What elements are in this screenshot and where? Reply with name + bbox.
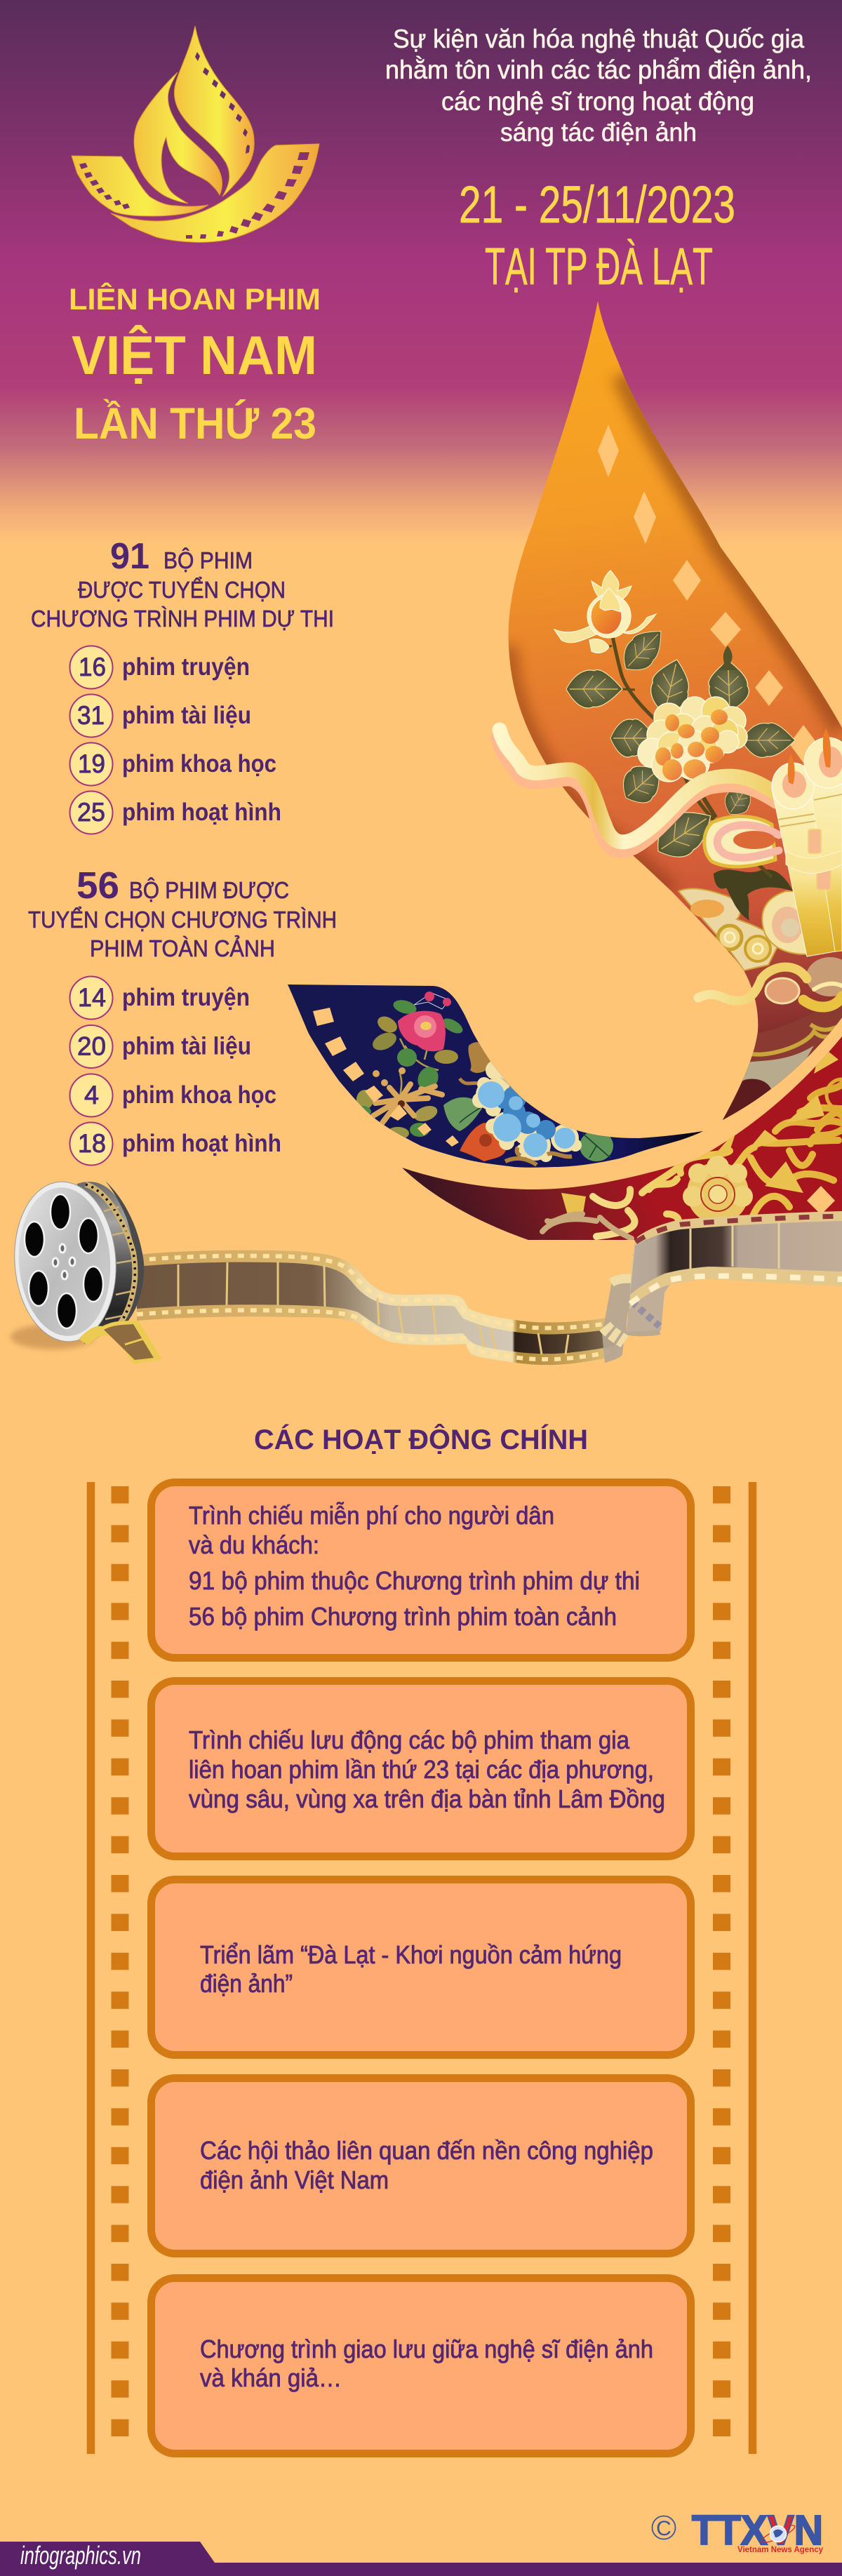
panel: artist exchange <box>152 2278 690 2453</box>
panel: free screenings: 56 bộ phim Chương trình phim toàn cảnh <box>189 1602 617 1631</box>
panel: exhibition <box>152 1879 690 2055</box>
embroidered flowers <box>400 1039 439 1100</box>
illustration: flowing ribbon <box>495 730 779 867</box>
panel: artist exchange: Chương trình giao lưu giữa nghệ sĩ điện ảnh <box>200 2335 653 2363</box>
panorama: animated films <box>70 1123 281 1165</box>
panel: free screenings <box>152 1482 690 1657</box>
reel holes <box>25 1194 103 1328</box>
competition heading: BỘ PHIM <box>163 547 253 573</box>
icon: festival logo <box>72 26 319 242</box>
title: festival name: LIÊN HOAN PHIM <box>69 282 321 316</box>
diamond perforation <box>807 1186 835 1215</box>
competition: science films: phim khoa học <box>122 750 276 778</box>
panel: artist exchange: và khán giả… <box>200 2363 342 2392</box>
title: festival name: VIỆT NAM <box>72 324 317 386</box>
panel: mobile screenings: Trình chiếu lưu động các bộ phim tham gia <box>189 1726 630 1754</box>
illustration: navy film ribbon <box>288 985 703 1168</box>
competition: documentary films: phim tài liệu <box>122 702 251 729</box>
logo: TTXVN agency: TTXVN <box>692 2507 823 2554</box>
panorama: feature films: phim truyện <box>122 984 250 1011</box>
gold scrollwork <box>593 1084 842 1236</box>
competition: feature films: phim truyện <box>122 653 250 681</box>
ribbon bow <box>704 816 775 867</box>
illustration: red brocade ribbon <box>402 1036 842 1240</box>
competition heading: 91 <box>110 536 149 577</box>
competition heading: ĐƯỢC TUYỂN CHỌN <box>78 577 286 603</box>
competition: documentary films <box>70 695 251 737</box>
text block: date and venue: TẠI TP ĐÀ LẠT <box>485 237 713 295</box>
competition: documentary films: 31 <box>77 701 105 730</box>
logo: TTXVN agency: C <box>656 2517 671 2540</box>
lower red clouds <box>723 1011 842 1120</box>
title: festival name <box>69 282 321 448</box>
text block: date and venue: 21 - 25/11/2023 <box>459 175 735 234</box>
illustration: peony branch <box>554 570 795 877</box>
reel face <box>9 1178 121 1345</box>
green branches <box>714 869 793 921</box>
panel: exhibition: điện ảnh” <box>200 1969 293 1998</box>
competition heading: CHƯƠNG TRÌNH PHIM DỰ THI <box>31 606 334 632</box>
peony flower <box>638 697 747 782</box>
panorama heading: 56 <box>76 865 119 907</box>
panel: seminars <box>152 2078 690 2254</box>
footer bar with site name: infographics.vn <box>20 2541 141 2570</box>
rosebud <box>554 570 656 653</box>
panel: exhibition: Triển lãm “Đà Lạt - Khơi nguồn cảm hứng <box>200 1940 622 1969</box>
panel: free screenings: và du khách: <box>189 1530 319 1559</box>
text block: panorama films <box>28 865 337 1165</box>
illustration: lower cloud ribbon <box>698 967 842 1007</box>
competition: science films <box>70 742 276 786</box>
text block: competition films <box>31 536 334 834</box>
text block: event description: Sự kiện văn hóa nghệ thuật Quốc gia <box>393 25 804 53</box>
loose film end <box>79 1321 162 1364</box>
reel body <box>77 1182 144 1344</box>
text block: event description: sáng tác điện ảnh <box>500 118 697 147</box>
reel shadow <box>11 1324 95 1349</box>
panorama: science films <box>70 1074 276 1117</box>
competition: feature films: 16 <box>79 653 106 681</box>
panorama: documentary films: 20 <box>77 1032 106 1061</box>
heading: main activities: CÁC HOẠT ĐỘNG CHÍNH <box>254 1423 588 1455</box>
panel: free screenings: Trình chiếu miễn phí cho người dân <box>189 1501 554 1530</box>
competition: animated films: 25 <box>77 798 105 827</box>
text block: event description: các nghệ sĩ trong hoạt động <box>441 87 754 116</box>
panorama heading <box>28 865 337 961</box>
competition: animated films <box>70 792 281 834</box>
film strip twist and loop <box>602 1279 660 1363</box>
panel: mobile screenings <box>152 1681 690 1857</box>
panorama: feature films <box>70 977 250 1019</box>
panorama: animated films: 18 <box>78 1129 106 1158</box>
title: festival name: LẦN THỨ 23 <box>74 399 316 448</box>
panel: mobile screenings: liên hoan phim lần thứ 23 tại các địa phương, <box>189 1755 654 1784</box>
upper film strip <box>629 1211 842 1309</box>
text block: event description: nhằm tôn vinh các tác phẩm điện ảnh, <box>385 55 812 84</box>
panorama heading: TUYỂN CHỌN CHƯƠNG TRÌNH <box>28 907 337 933</box>
panorama heading: BỘ PHIM ĐƯỢC <box>129 877 289 903</box>
footer bar with site name <box>0 2541 842 2576</box>
panorama: animated films: phim hoạt hình <box>122 1130 281 1157</box>
panel: mobile screenings: vùng sâu, vùng xa trên địa bàn tỉnh Lâm Đồng <box>189 1784 665 1813</box>
panel: seminars: điện ảnh Việt Nam <box>200 2165 389 2194</box>
competition: science films: 19 <box>78 749 105 778</box>
decorative clouds <box>679 888 779 970</box>
competition: animated films: phim hoạt hình <box>122 799 281 826</box>
logo: TTXVN agency: Vietnam News Agency <box>737 2546 824 2554</box>
text block: date and venue <box>459 175 735 295</box>
panorama heading: PHIM TOÀN CẢNH <box>90 935 275 961</box>
panorama: science films: 4 <box>84 1081 99 1109</box>
brocade peony <box>683 1156 753 1224</box>
panorama: documentary films: phim tài liệu <box>122 1033 251 1060</box>
panorama: feature films: 14 <box>78 983 106 1012</box>
illustration: paper scrolls with wicks <box>772 728 842 956</box>
illustration: long film strip <box>137 1211 842 1365</box>
text block: event description <box>385 25 812 147</box>
panorama: documentary films <box>70 1025 251 1068</box>
film perforations <box>313 1008 459 1147</box>
flame body <box>509 301 842 1120</box>
competition heading <box>31 536 334 632</box>
illustration: film reel <box>9 1178 162 1364</box>
panorama: science films: phim khoa học <box>122 1081 276 1109</box>
competition: feature films <box>70 646 250 689</box>
header gradient band <box>0 0 842 544</box>
film frame: rails and perforations <box>91 1482 752 2454</box>
panel: free screenings: 91 bộ phim thuộc Chương trình phim dự thi <box>189 1566 640 1595</box>
panel: seminars: Các hội thảo liên quan đến nền công nghiệp <box>200 2136 653 2165</box>
illustration: film flame <box>509 301 842 1123</box>
diamond perforations <box>598 425 817 763</box>
